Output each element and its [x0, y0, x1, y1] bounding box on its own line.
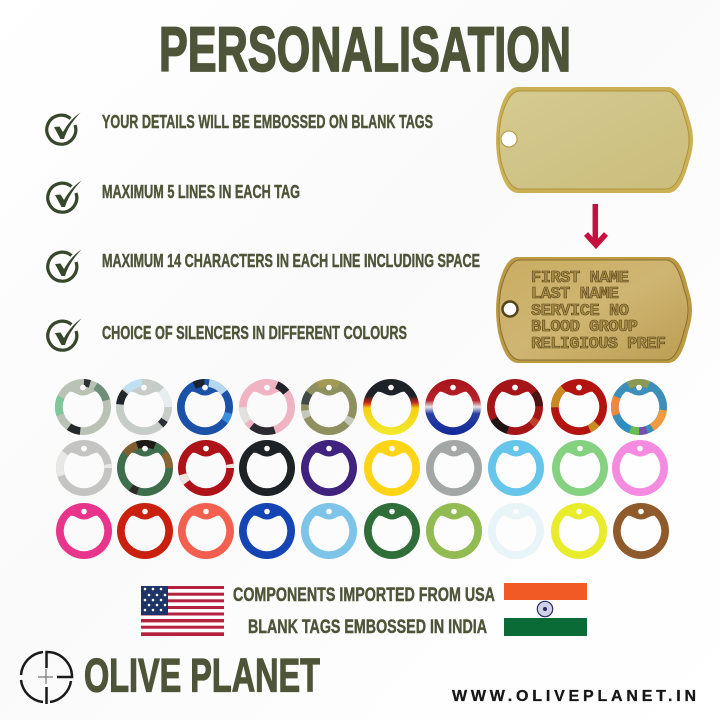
silencer: light blue — [301, 503, 357, 559]
silencer: red — [117, 503, 173, 559]
silencer: lime green — [426, 503, 482, 559]
origin text: COMPONENTS IMPORTED FROM USA — [233, 585, 495, 606]
embossed text lines: RELIGIOUS PREF — [531, 335, 666, 354]
blank dog tag — [496, 87, 693, 193]
silencer: red white — [178, 440, 234, 496]
silencer: dark red camo — [487, 379, 543, 435]
silencer: red white blue — [425, 379, 481, 435]
embossed text lines — [531, 269, 666, 354]
silencer: royal blue — [239, 503, 295, 559]
logo — [21, 648, 320, 704]
origin text — [233, 585, 495, 638]
row 2 silencers — [56, 440, 668, 496]
text: maximum characters: MAXIMUM 14 CHARACTERS IN EACH LINE INCLUDING SPACE — [102, 250, 480, 271]
silencer: green camo — [55, 379, 111, 435]
silencer: light green — [552, 440, 608, 496]
silencer: glow white — [488, 503, 544, 559]
silencer: neon yellow — [551, 503, 607, 559]
row 3 silencers — [56, 503, 669, 559]
embossed text lines: SERVICE NO — [531, 302, 629, 321]
wordmark: OLIVE PLANET — [84, 648, 320, 702]
text: silencer colours: CHOICE OF SILENCERS IN DIFFERENT COLOURS — [102, 322, 407, 343]
text: embossed details: YOUR DETAILS WILL BE EMBOSSED ON BLANK TAGS — [102, 111, 433, 132]
silencer: hot pink — [56, 503, 112, 559]
silencer: sky blue — [488, 440, 544, 496]
silencer: purple — [301, 440, 357, 496]
feature list — [47, 111, 480, 350]
silencer: olive camo — [301, 379, 357, 435]
icon: USA flag — [141, 586, 224, 636]
silencer: red orange — [551, 379, 607, 435]
icon: check 4 — [48, 318, 82, 350]
text: maximum lines: MAXIMUM 5 LINES IN EACH TAG — [102, 181, 300, 202]
icon: check 1 — [47, 112, 80, 144]
silencer: blue camo — [177, 379, 233, 435]
icon: India flag — [504, 583, 587, 636]
silencer: grey white — [56, 440, 112, 496]
silencer: pink — [612, 440, 668, 496]
silencer: forest green — [364, 503, 420, 559]
embossed text lines: LAST NAME — [531, 285, 619, 304]
icon: check 2 — [48, 180, 82, 212]
silencer colour grid — [55, 379, 669, 559]
embossed text lines: FIRST NAME — [531, 269, 629, 288]
icon: crosshair — [21, 652, 72, 704]
silencer: brown — [613, 503, 669, 559]
embossed text lines: BLOOD GROUP — [531, 318, 638, 337]
silencer: black red yellow — [363, 379, 419, 435]
silencer: grey — [426, 440, 482, 496]
website url: WWW.OLIVEPLANET.IN — [452, 688, 696, 705]
origin text: BLANK TAGS EMBOSSED IN INDIA — [248, 617, 487, 638]
silencer: pink camo — [239, 379, 295, 435]
silencer: black — [239, 440, 295, 496]
silencer: yellow — [364, 440, 420, 496]
icon: check 3 — [48, 250, 82, 281]
row 1: camo and multicolour silencers — [55, 379, 667, 435]
silencer: woodland camo — [117, 440, 173, 496]
arrow: blank tag to embossed tag — [586, 204, 606, 245]
silencer: white black blue camo — [116, 379, 172, 435]
silencer: coral — [178, 503, 234, 559]
silencer: rainbow — [611, 379, 667, 435]
embossed dog tag — [496, 257, 692, 363]
